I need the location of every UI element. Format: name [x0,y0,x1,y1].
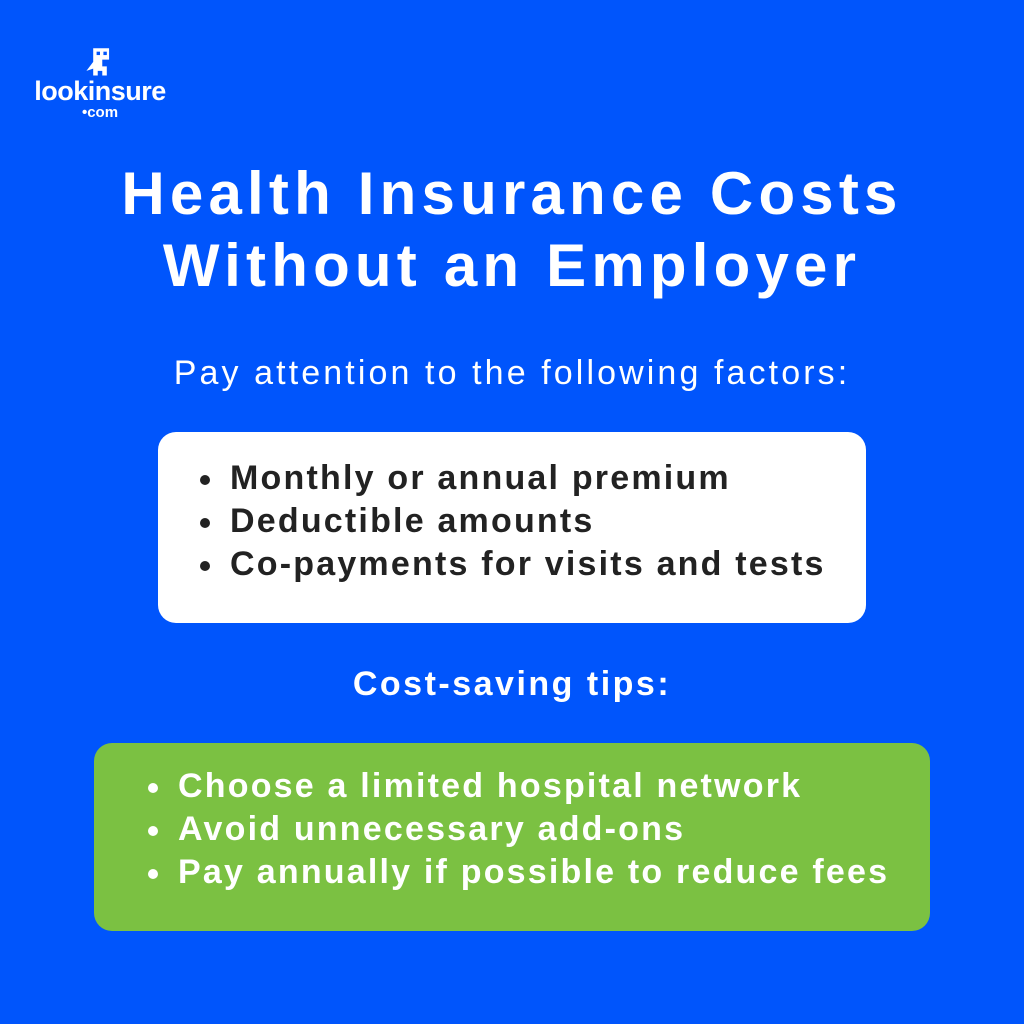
heading: tips: Cost-saving tips: [353,665,671,703]
title: Health Insurance Costs [121,160,903,227]
title [121,160,903,299]
item: Monthly or annual premium [230,459,731,497]
title: Without an Employer [163,232,861,299]
item: Choose a limited hospital network [178,767,802,805]
panel: factors [158,432,866,623]
item: Deductible amounts [230,502,595,540]
icon: dino mascot [86,48,110,76]
subtitle: Pay attention to the following factors: [174,354,850,392]
logo text: lookinsure [34,76,166,106]
logo subtext: •com [82,104,118,121]
item: Pay annually if possible to reduce fees [178,853,889,891]
panel: tips [94,743,930,931]
logo [34,48,166,121]
item: Co-payments for visits and tests [230,545,826,583]
item: Avoid unnecessary add-ons [178,810,685,848]
